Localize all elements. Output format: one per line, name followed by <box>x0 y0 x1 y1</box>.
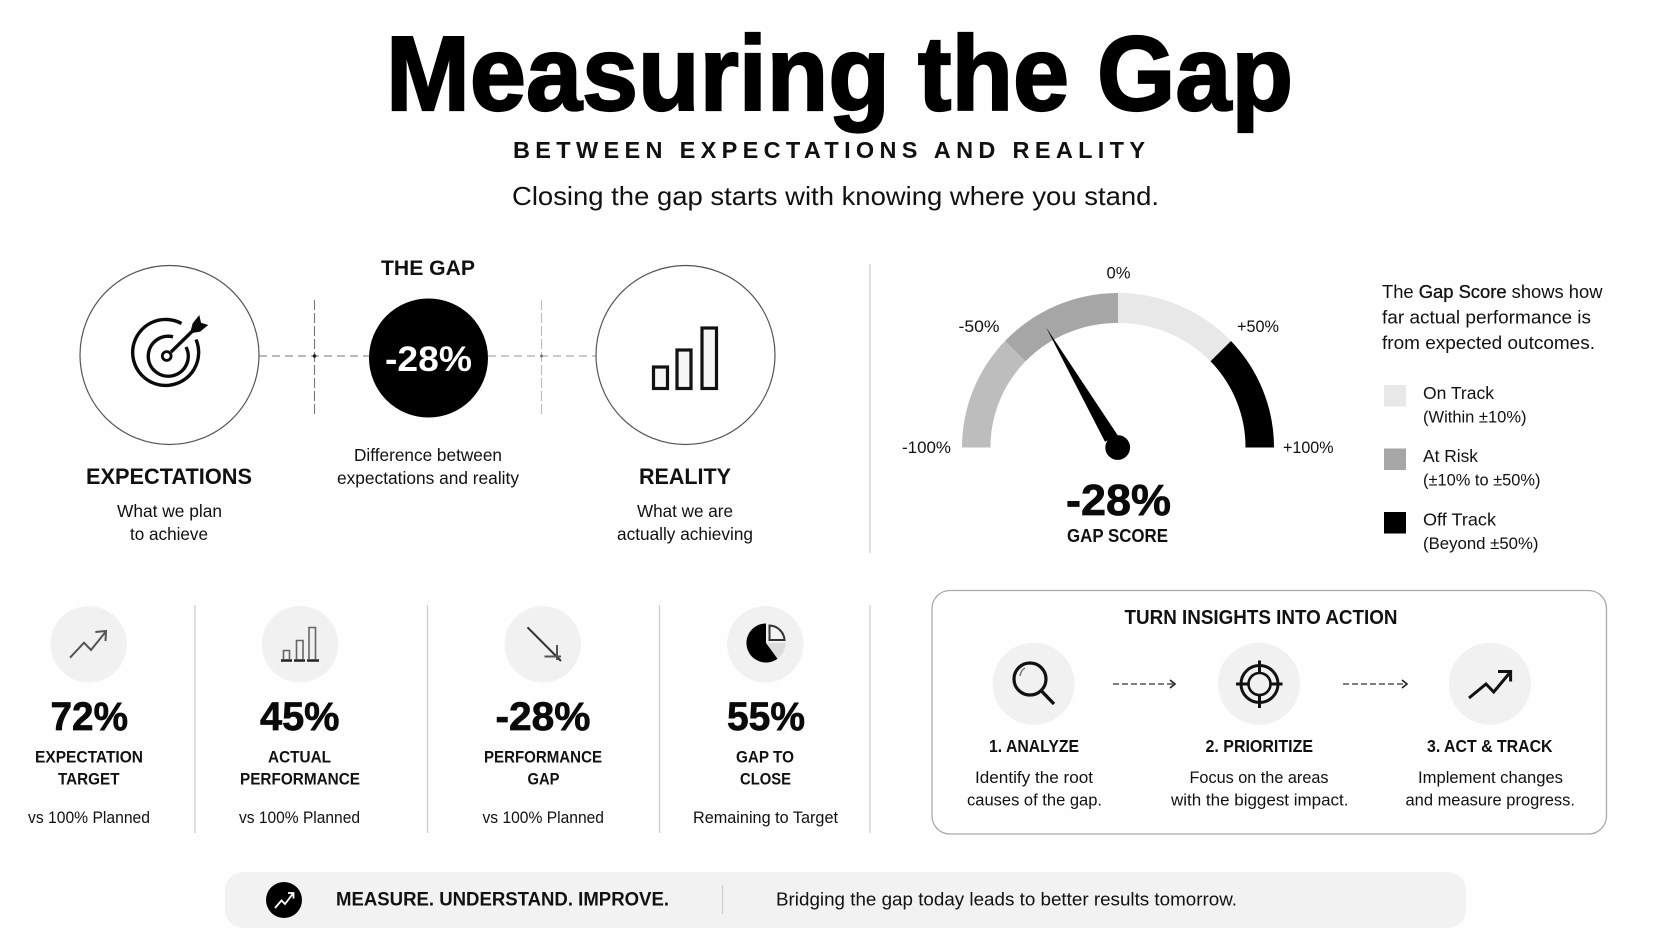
arrow: prioritize to act <box>1343 680 1407 688</box>
expectations description: to achieve <box>130 524 208 544</box>
reality description: What we are <box>637 501 733 521</box>
icon: trend badge <box>266 882 302 918</box>
gauge explanation: from expected outcomes. <box>1382 333 1595 353</box>
gap description: expectations and reality <box>337 468 519 488</box>
metric: actual performance <box>239 606 360 827</box>
gauge scale labels: -50% <box>958 318 1000 336</box>
expectations circle with target icon <box>80 266 259 444</box>
legend: at risk: At Risk <box>1423 446 1478 466</box>
gap description: Difference between <box>354 445 502 465</box>
metric label <box>35 748 143 788</box>
metric label: PERFORMANCE <box>240 770 360 788</box>
metric label <box>736 748 794 788</box>
metric value: 45% <box>260 695 340 739</box>
step 2 text: with the biggest impact. <box>1170 790 1348 810</box>
panel: turn insights into action <box>932 590 1606 834</box>
panel: gap score gauge <box>902 264 1604 553</box>
subtitle: BETWEEN EXPECTATIONS AND REALITY <box>513 137 1145 163</box>
gap description <box>337 445 519 488</box>
gauge scale labels <box>902 264 1334 457</box>
legend: off track <box>1384 510 1538 553</box>
step 2 text: 2. PRIORITIZE <box>1206 736 1313 756</box>
metric label: GAP TO <box>736 748 794 766</box>
icon: rising trend <box>50 606 127 682</box>
legend: at risk <box>1384 446 1540 490</box>
metric value: 55% <box>727 695 805 739</box>
icon: trend arrow <box>1449 643 1531 725</box>
step 3 text <box>1406 736 1575 810</box>
footer banner <box>225 872 1466 928</box>
gap value circle: -28% <box>385 340 472 379</box>
gauge explanation: The Gap Score shows how <box>1382 282 1604 302</box>
step 3 text: 3. ACT & TRACK <box>1427 736 1553 756</box>
reality heading: REALITY <box>639 464 731 489</box>
metric label: EXPECTATION <box>35 748 143 766</box>
connector lines <box>259 300 596 416</box>
step 3 text: Implement changes <box>1418 768 1563 787</box>
metric value: 72% <box>50 695 128 739</box>
expectations description: What we plan <box>117 501 222 521</box>
step 3 text: and measure progress. <box>1406 790 1575 810</box>
icon: magnifying glass <box>993 643 1075 725</box>
metric label <box>240 748 360 788</box>
gauge scale labels: +50% <box>1237 318 1279 336</box>
icon: crosshair <box>1218 643 1300 725</box>
legend: off track: Off Track <box>1423 510 1496 530</box>
metric label: TARGET <box>58 770 120 788</box>
gap heading: THE GAP <box>381 257 475 280</box>
gauge explanation <box>1382 282 1604 353</box>
legend: on track <box>1384 383 1526 426</box>
gauge scale labels: +100% <box>1283 439 1334 457</box>
metric: performance gap <box>482 606 604 827</box>
metric note: vs 100% Planned <box>28 809 150 827</box>
step 2 text <box>1170 736 1348 810</box>
reality circle with bar icon <box>596 266 775 444</box>
panel: expectations versus reality <box>80 257 775 544</box>
metric label <box>484 748 602 788</box>
metric value: -28% <box>496 695 590 739</box>
metric note: vs 100% Planned <box>239 809 360 827</box>
step 1 text: 1. ANALYZE <box>989 736 1079 756</box>
gauge needle <box>1046 327 1130 460</box>
icon: falling arrow <box>504 606 581 682</box>
tagline: Closing the gap starts with knowing where you stand. <box>512 181 1159 211</box>
gauge scale labels: -100% <box>902 439 951 457</box>
metric label: PERFORMANCE <box>484 748 602 766</box>
step 1 text: Identify the root <box>975 768 1093 787</box>
metric: gap to close <box>693 606 838 827</box>
reality description: actually achieving <box>617 524 753 544</box>
icon: small bars <box>262 606 338 682</box>
metric label: ACTUAL <box>268 748 331 766</box>
legend: off track: (Beyond ±50%) <box>1423 534 1538 553</box>
step 1 text: causes of the gap. <box>967 790 1102 810</box>
gap value circle <box>369 298 488 418</box>
legend: on track: On Track <box>1423 383 1494 403</box>
metric: expectation target <box>28 606 150 827</box>
step 1 text <box>967 736 1102 810</box>
title: Measuring the Gap <box>386 15 1293 133</box>
banner message: Bridging the gap today leads to better results tomorrow. <box>776 888 1237 910</box>
panel heading: TURN INSIGHTS INTO ACTION <box>1124 607 1398 629</box>
legend: on track: (Within ±10%) <box>1423 408 1526 426</box>
reality description <box>617 501 753 544</box>
gauge value: -28% <box>1066 476 1171 525</box>
expectations heading: EXPECTATIONS <box>86 464 252 489</box>
arrow: analyze to prioritize <box>1113 680 1175 688</box>
metric note: vs 100% Planned <box>482 809 604 827</box>
metric label: CLOSE <box>740 770 791 788</box>
step 2 text: Focus on the areas <box>1190 768 1328 787</box>
legend: at risk: (±10% to ±50%) <box>1423 470 1540 490</box>
expectations description <box>117 501 222 544</box>
icon: pie chart <box>727 606 804 682</box>
gauge arc <box>962 293 1274 448</box>
gauge explanation: far actual performance is <box>1382 308 1591 328</box>
metric note: Remaining to Target <box>693 809 838 827</box>
gauge scale labels: 0% <box>1106 264 1131 282</box>
metric label: GAP <box>528 770 560 788</box>
gauge label: GAP SCORE <box>1067 526 1168 546</box>
banner slogan: MEASURE. UNDERSTAND. IMPROVE. <box>336 888 669 910</box>
